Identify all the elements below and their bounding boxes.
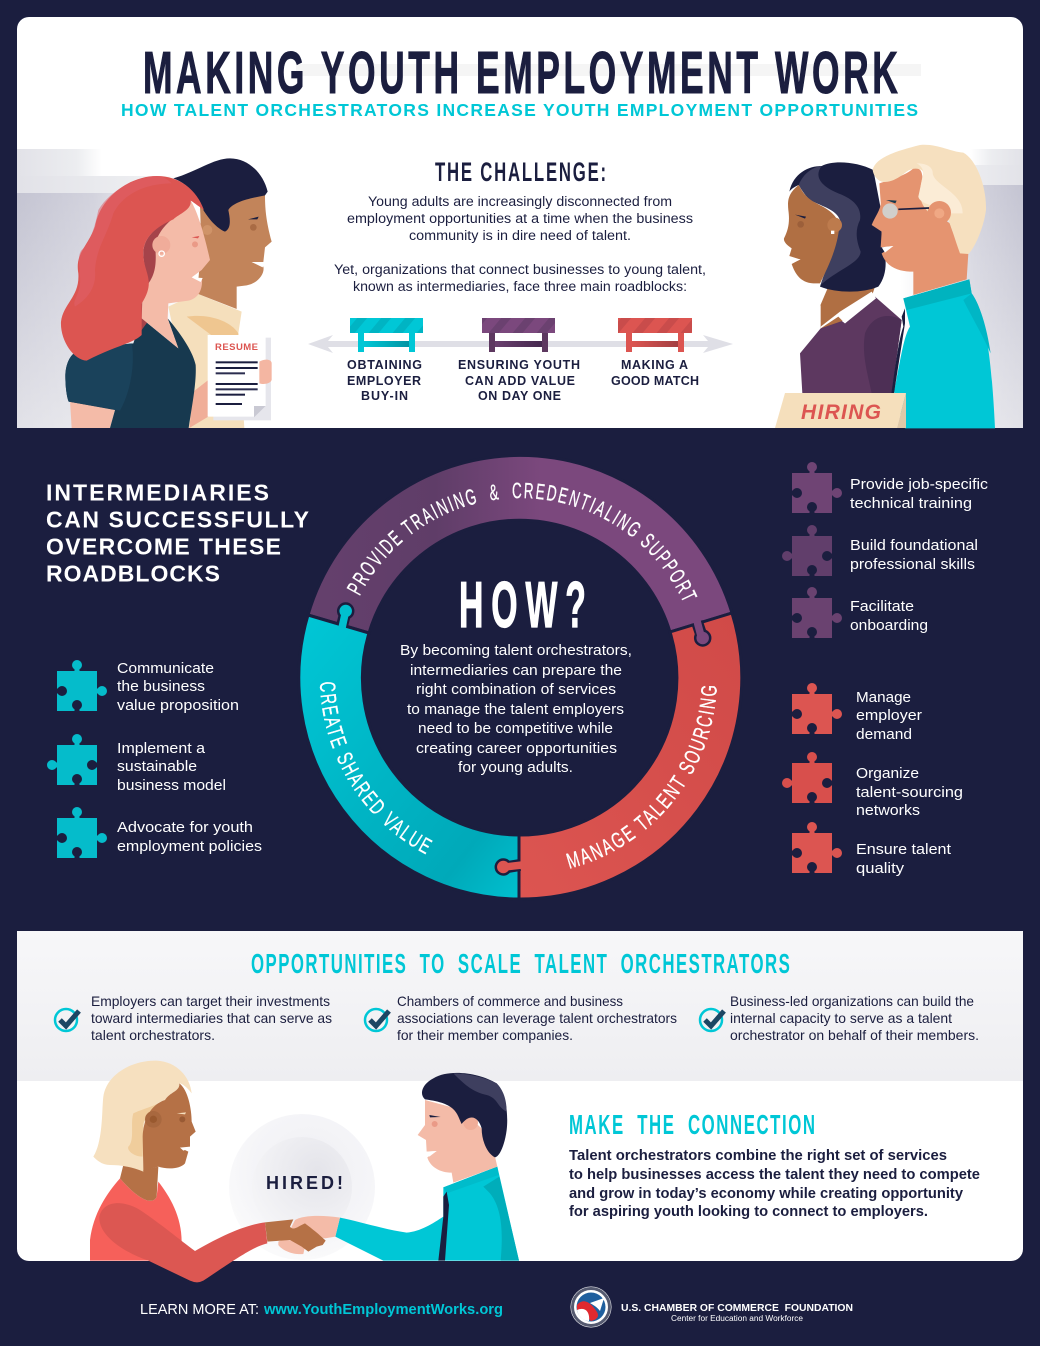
label: obtaining employer buy-in: EMPLOYER [347, 374, 421, 388]
text: professional skills [850, 537, 978, 573]
text: manage employer demand: Manage [856, 689, 911, 706]
text block: make the connection: Talent orchestrators combine the right set of services [569, 1147, 947, 1164]
heading: intermediaries overcome roadblocks [46, 480, 309, 586]
footer: learn more [140, 1302, 503, 1318]
text: sustainable business model [117, 740, 226, 794]
puzzle knob: red [496, 860, 522, 874]
text: advocate for policies: Advocate for youth [117, 819, 253, 836]
icon: purple puzzle 2 [782, 525, 833, 577]
illustration: job seekers with resume [61, 158, 272, 428]
text: facilitate onboarding: onboarding [850, 617, 928, 634]
text: chambers of commerce: Chambers of commerce and business [397, 993, 623, 1009]
label: making a good match: MAKING A [621, 358, 688, 372]
text block: make the connection: for aspiring youth looking to connect to employers. [569, 1203, 928, 1220]
icon: red puzzle 2 [782, 752, 833, 804]
footer: chamber foundation name: U.S. CHAMBER OF COMMERCE FOUNDATION [621, 1302, 853, 1314]
hiring sign: HIRING [801, 401, 881, 424]
text: employers: Employers can target their investments [91, 993, 330, 1009]
text block: how explanation: for young adults. [458, 759, 573, 776]
footer: chamber foundation name: Center for Education and Workforce [671, 1314, 804, 1323]
icon: teal barricade [350, 318, 423, 352]
text block: how explanation [400, 642, 632, 776]
ring label: create shared value: CREATE SHARED VALUE [320, 682, 433, 854]
icon: purple barricade [482, 318, 555, 352]
text: business-led organizations [730, 993, 979, 1043]
text: technical training: Provide job-specific [850, 476, 989, 493]
text: technical training: technical training [850, 495, 972, 512]
heading: the challenge: THE CHALLENGE: [435, 157, 606, 187]
text block: how explanation: to manage the talent employers [407, 701, 624, 718]
heading: opportunities to scale: OPPORTUNITIES TO SCALE TALENT ORCHESTRATORS [251, 948, 790, 979]
text: organize talent-sourcing networks: networks [856, 802, 920, 819]
text: business-led organizations: orchestrator on behalf of their members. [730, 1027, 979, 1043]
icon: check 2 [365, 1009, 389, 1031]
text: manage employer demand: employer [856, 707, 922, 724]
text: communicate value proposition [117, 660, 239, 714]
text: employers: talent orchestrators. [91, 1027, 215, 1043]
icon: teal puzzle 3 [56, 807, 107, 859]
icon: check 1 [55, 1009, 79, 1031]
text: facilitate onboarding [850, 598, 928, 634]
icon: red puzzle 3 [791, 822, 842, 874]
puzzle knob: teal [338, 604, 353, 628]
title: MAKING YOUTH EMPLOYMENT WORK [143, 41, 898, 106]
icon: check 3 [700, 1009, 724, 1031]
text: organize talent-sourcing networks: talent-sourcing [856, 784, 963, 801]
hiring sign [775, 393, 906, 428]
text: chambers of commerce: associations can leverage talent orchestrators [397, 1010, 677, 1026]
footer: learn more: www.YouthEmploymentWorks.org [263, 1302, 503, 1318]
text: manage employer demand: demand [856, 726, 912, 743]
text: employers [91, 993, 332, 1043]
text block: make the connection: to help businesses access the talent they need to compete [569, 1166, 980, 1183]
text: technical training [850, 476, 989, 512]
footer: learn more: LEARN MORE AT: [140, 1302, 259, 1318]
label: hired: HIRED! [266, 1173, 343, 1193]
ring label: provide training and credentialing support: PROVIDE TRAINING & CREDENTIALING SUPPORT [346, 482, 698, 600]
chart: puzzle ring [300, 456, 740, 898]
icon: red puzzle 1 [791, 683, 842, 735]
text: employers: toward intermediaries that can serve as [91, 1010, 332, 1026]
challenge text block [334, 194, 706, 294]
resume label: RESUME [215, 342, 258, 353]
text block: how explanation: intermediaries can prepare the [410, 662, 622, 679]
text: ensure talent quality: Ensure talent [856, 841, 952, 858]
text: advocate for policies [117, 819, 262, 855]
illustration: hiring managers [784, 145, 995, 428]
text: advocate for policies: employment policies [117, 838, 262, 855]
label: making a good match [611, 358, 699, 388]
ring segment: purple [308, 455, 732, 633]
heading: intermediaries overcome roadblocks: INTERMEDIARIES [46, 480, 269, 506]
text block: make the connection [569, 1147, 980, 1220]
challenge text block: community is in dire need of talent. [409, 228, 631, 243]
subtitle: HOW TALENT ORCHESTRATORS INCREASE YOUTH EMPLOYMENT OPPORTUNITIES [121, 100, 918, 120]
label: ensuring youth can add value: CAN ADD VALUE [465, 374, 575, 388]
footer: chamber foundation name [621, 1302, 853, 1323]
panel: header and challenge card [17, 17, 1023, 428]
heading: intermediaries overcome roadblocks: ROADBLOCKS [46, 560, 220, 586]
icon: red barricade [618, 318, 692, 352]
puzzle knob: purple [695, 621, 710, 646]
heading: intermediaries overcome roadblocks: CAN SUCCESSFULLY [46, 506, 309, 532]
challenge text block: known as intermediaries, face three main roadblocks: [353, 279, 687, 294]
label: obtaining employer buy-in: OBTAINING [347, 358, 422, 372]
challenge text block: Yet, organizations that connect businesses to young talent, [334, 262, 706, 277]
text: manage employer demand [856, 689, 922, 743]
panel: make the connection [17, 1081, 1023, 1261]
icon: purple puzzle 3 [791, 587, 842, 639]
text block: make the connection: and grow in today’s economy while creating opportunity [569, 1185, 964, 1202]
text: communicate value proposition: value proposition [117, 697, 239, 714]
text: facilitate onboarding: Facilitate [850, 598, 914, 615]
text: communicate value proposition: Communicate [117, 660, 214, 677]
heading: how: HOW? [459, 568, 586, 641]
text: sustainable business model: business model [117, 777, 226, 794]
icon: teal puzzle 2 [47, 734, 98, 786]
heading: intermediaries overcome roadblocks: OVERCOME THESE [46, 534, 281, 560]
text: business-led organizations: Business-led organizations can build the [730, 993, 974, 1009]
text block: how explanation: creating career opportunities [416, 740, 617, 757]
text: chambers of commerce: for their member companies. [397, 1027, 573, 1043]
ring segment: teal [299, 615, 519, 899]
text: ensure talent quality [856, 841, 952, 877]
heading: make the connection: MAKE THE CONNECTION [569, 1109, 815, 1140]
text: organize talent-sourcing networks: Organize [856, 765, 919, 782]
text: business-led organizations: internal capacity to serve as a talent [730, 1010, 952, 1026]
icon: hired circle [229, 1114, 375, 1260]
challenge text block: employment opportunities at a time when the business [347, 211, 693, 226]
label: obtaining employer buy-in: BUY-IN [361, 389, 408, 403]
text: chambers of commerce [397, 993, 677, 1043]
label: obtaining employer buy-in [347, 358, 422, 403]
icon: purple puzzle 1 [791, 462, 842, 514]
label: ensuring youth can add value: ENSURING YOUTH [458, 358, 580, 372]
text: organize talent-sourcing networks [856, 765, 963, 819]
challenge text block: Young adults are increasingly disconnected from [368, 194, 672, 209]
text: professional skills: professional skills [850, 556, 975, 573]
label: ensuring youth can add value: ON DAY ONE [478, 389, 561, 403]
panel: opportunities [17, 931, 1023, 1081]
text: ensure talent quality: quality [856, 860, 905, 877]
text: communicate value proposition: the business [117, 678, 205, 695]
arrow: roadblock path [308, 335, 733, 353]
text: sustainable business model: Implement a [117, 740, 206, 757]
text block: how explanation: By becoming talent orchestrators, [400, 642, 632, 659]
label: making a good match: GOOD MATCH [611, 374, 699, 388]
ring label: manage talent sourcing: MANAGE TALENT SOURCING [566, 686, 717, 869]
icon: chamber logo [570, 1286, 612, 1328]
text: sustainable business model: sustainable [117, 758, 197, 775]
illustration: handshake [90, 1061, 519, 1282]
text: professional skills: Build foundational [850, 537, 978, 554]
icon: teal puzzle 1 [56, 660, 107, 712]
label: ensuring youth can add value [458, 358, 580, 403]
ring segment: red [519, 613, 742, 899]
text block: how explanation: need to be competitive while [418, 720, 613, 737]
text block: how explanation: right combination of services [416, 681, 616, 698]
